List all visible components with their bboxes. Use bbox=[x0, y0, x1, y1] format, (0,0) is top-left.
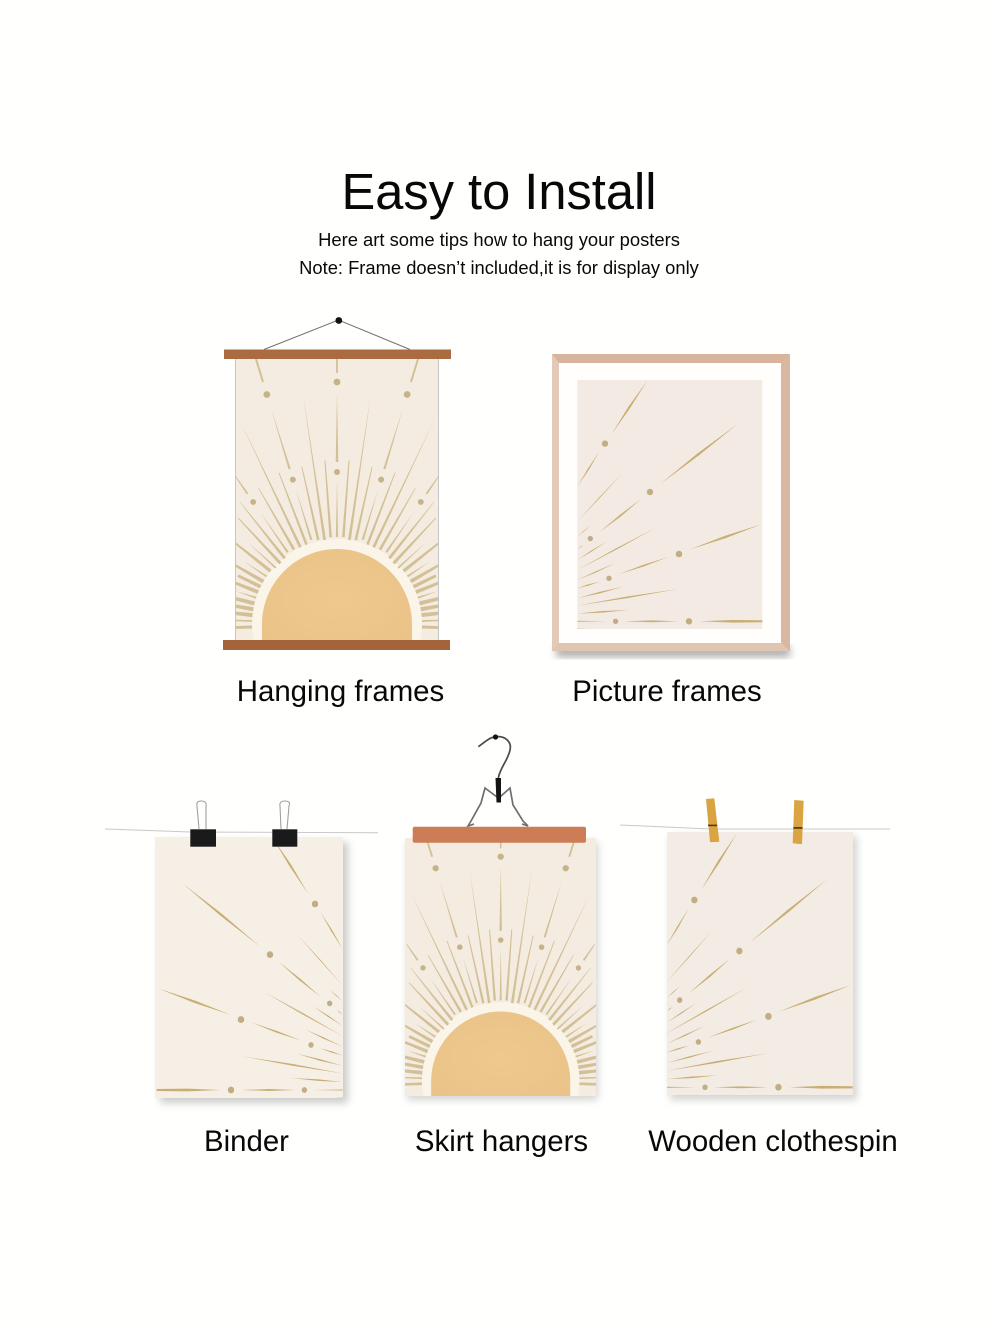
bottom wooden bar bbox=[223, 640, 450, 650]
wall nail bbox=[335, 317, 342, 324]
poster shadow bbox=[407, 842, 598, 1100]
string bbox=[105, 829, 378, 833]
clothespin right bbox=[793, 800, 804, 844]
wooden frame bbox=[552, 354, 790, 651]
hanging wire bbox=[264, 320, 410, 350]
hanger hook and wires bbox=[468, 737, 528, 826]
label: wooden clothespin: Wooden clothespin bbox=[648, 1125, 898, 1158]
top wooden bar bbox=[224, 350, 451, 359]
label: binder: Binder bbox=[204, 1125, 289, 1158]
subtitle: tips line: Here art some tips how to hang your posters bbox=[318, 229, 680, 250]
frame shadow bbox=[556, 646, 790, 657]
label: hanging frames: Hanging frames bbox=[237, 675, 444, 708]
binder clip right bbox=[272, 801, 297, 847]
hanger nail bbox=[493, 734, 498, 740]
binder clip left bbox=[190, 801, 216, 847]
subtitle: note line: Note: Frame doesn’t included,it is for display only bbox=[299, 257, 700, 278]
poster artwork: mirrored rays bbox=[155, 837, 343, 1098]
wooden hanger bar bbox=[413, 827, 586, 843]
poster artwork: sunburst bbox=[405, 838, 596, 1096]
string bbox=[620, 825, 890, 829]
panel: wooden clothespin poster bbox=[620, 798, 890, 1100]
poster artwork: sunburst bbox=[236, 359, 438, 640]
panel: binder poster bbox=[105, 801, 378, 1103]
title: Easy to Install bbox=[342, 163, 656, 220]
poster shadow bbox=[670, 836, 857, 1100]
poster shadow bbox=[160, 842, 348, 1103]
panel: skirt hanger poster bbox=[404, 734, 602, 1104]
poster artwork: rays bbox=[667, 832, 853, 1096]
hanger handle bbox=[496, 778, 501, 802]
panel: hanging frames poster bbox=[223, 317, 451, 650]
white mat bbox=[559, 363, 781, 643]
clothespin left bbox=[706, 798, 719, 842]
poster artwork: rays bbox=[577, 380, 763, 629]
panel: picture frame bbox=[552, 354, 790, 657]
label: picture frames: Picture frames bbox=[572, 675, 762, 708]
label: skirt hangers: Skirt hangers bbox=[415, 1125, 588, 1158]
